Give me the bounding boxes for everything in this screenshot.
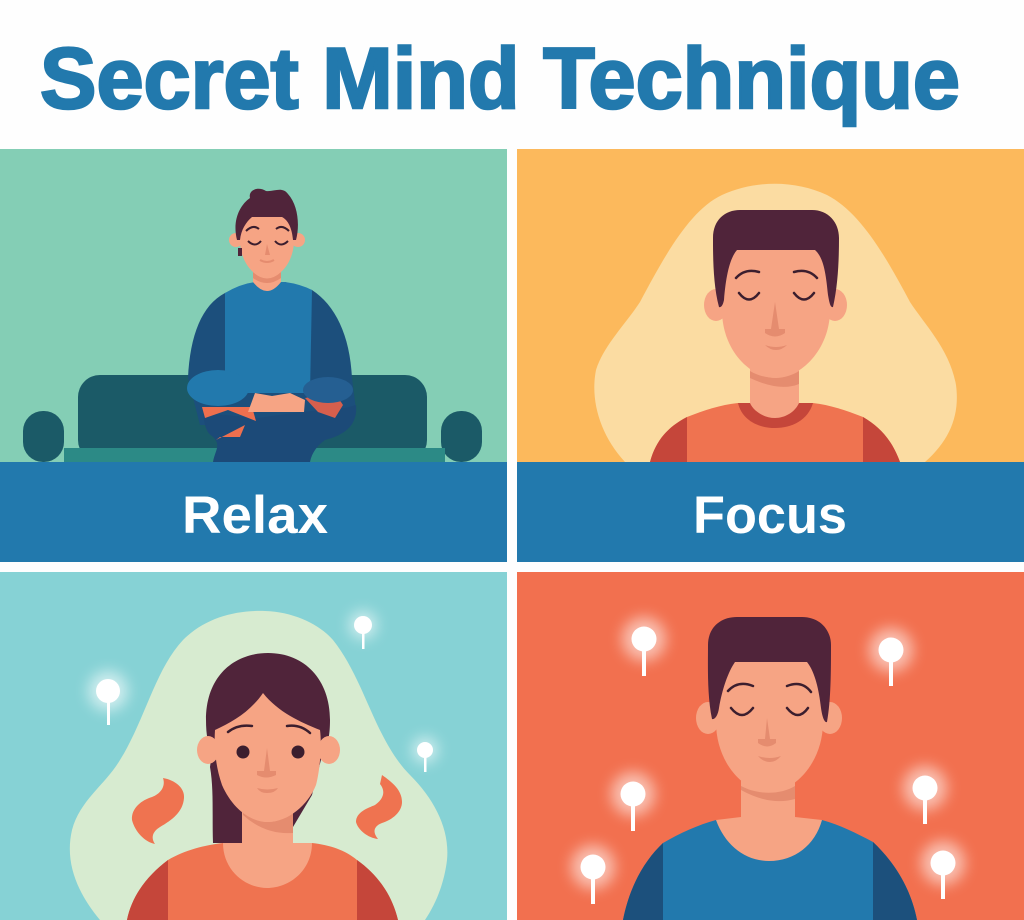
person: woman xyxy=(127,653,398,920)
panel: relax xyxy=(0,149,507,562)
aura xyxy=(70,611,447,920)
icon: light dots xyxy=(88,611,438,772)
panel: insight xyxy=(517,572,1024,920)
aura xyxy=(594,184,957,462)
title: Secret Mind Technique xyxy=(40,31,960,127)
person: meditating xyxy=(187,189,356,462)
icon: light dots xyxy=(571,617,965,904)
banner: relax xyxy=(0,462,507,562)
banner: focus xyxy=(517,462,1024,562)
banner: focus: Focus xyxy=(693,486,847,545)
icon: right flame xyxy=(356,775,402,839)
icon: left flame xyxy=(132,778,184,844)
panel: focus xyxy=(517,149,1024,562)
panel: visualize xyxy=(0,572,507,920)
banner: relax: Relax xyxy=(182,486,329,545)
person: insight xyxy=(623,617,917,920)
icon: sofa xyxy=(23,375,482,462)
person: focus xyxy=(650,210,900,462)
